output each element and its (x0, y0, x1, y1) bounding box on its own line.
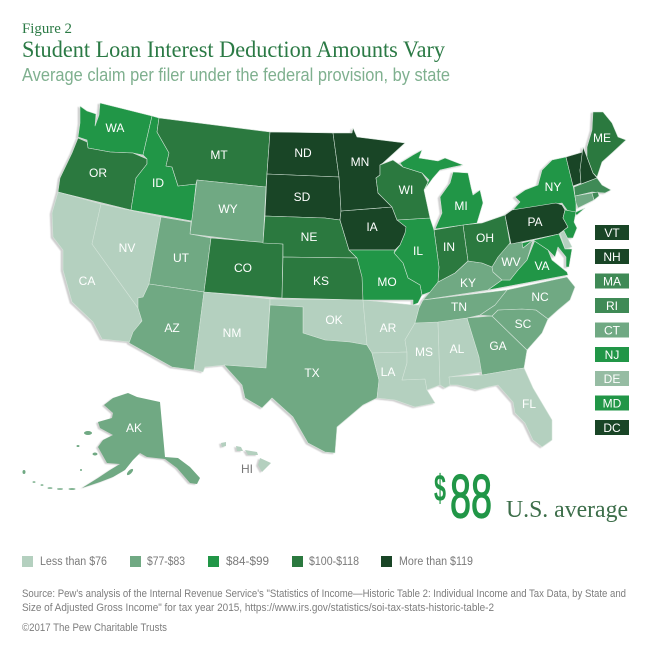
key: NJ (595, 347, 629, 362)
key: CT: CT (604, 324, 621, 338)
small-state key (595, 225, 629, 435)
key: MA (595, 274, 629, 288)
state: MI upper peninsula (400, 150, 463, 189)
state labels: NE (301, 230, 317, 244)
state labels: TX (304, 366, 320, 380)
state: OK (270, 299, 367, 345)
state labels: CA (79, 274, 95, 288)
state: IL (394, 218, 439, 295)
legend: $100-$118: $100-$118 (309, 556, 359, 568)
state labels: SD (294, 190, 311, 204)
subtitle: Average claim per filer under the federal provision, by state (22, 65, 450, 85)
state: GA (467, 316, 527, 375)
key: RI (595, 298, 629, 313)
state: MA (574, 178, 611, 196)
key: NH: NH (603, 250, 621, 264)
state: HI (221, 442, 271, 472)
state labels: LA (381, 365, 395, 379)
state: MO (349, 250, 422, 305)
state: AK (82, 393, 200, 488)
state: TN (415, 290, 507, 323)
state: DE (560, 231, 572, 249)
state: NY (512, 157, 585, 215)
state labels: UT (173, 251, 190, 265)
state labels: FL (522, 397, 536, 411)
figure label: Figure 2 (22, 21, 72, 37)
title: Student Loan Interest Deduction Amounts Vary (22, 37, 445, 62)
state: ID (131, 116, 196, 221)
state: FL (449, 368, 552, 447)
state: CT (575, 193, 594, 208)
state labels: ID (152, 176, 164, 190)
state: OH (463, 215, 510, 267)
callout: U.S. average (434, 462, 628, 530)
callout: U.S. average: U.S. average (506, 497, 628, 523)
state labels: TN (451, 300, 467, 314)
state: AZ (129, 284, 204, 370)
state: MN (333, 128, 405, 211)
state labels (79, 121, 611, 476)
key: VT: VT (604, 226, 620, 240)
state labels: MI (454, 199, 468, 213)
state labels: IN (443, 240, 455, 254)
state: NC (480, 277, 575, 319)
legend: $77-$83 (130, 556, 185, 568)
key: DC (595, 420, 629, 435)
state labels: WI (399, 183, 413, 197)
state: VT (566, 152, 583, 186)
state labels: VA (534, 259, 550, 273)
state: MT (157, 118, 270, 187)
state: MS (402, 322, 440, 390)
state: KY (423, 261, 502, 300)
state labels: AZ (164, 321, 180, 335)
key: NJ: NJ (605, 348, 619, 362)
state labels: OK (325, 313, 343, 327)
state labels: CO (234, 261, 252, 275)
key: RI: RI (606, 299, 618, 313)
state labels: SC (515, 317, 532, 331)
key: DE: DE (604, 372, 620, 386)
key: VT (595, 225, 629, 240)
key: DC: DC (603, 421, 621, 435)
state labels: MO (377, 275, 397, 289)
key: MA: MA (603, 274, 621, 288)
state: AR (363, 300, 420, 353)
state labels: IA (366, 220, 378, 234)
state: TX (224, 305, 379, 453)
state labels: WY (218, 202, 238, 216)
legend: less than $76: Less than $76 (40, 556, 107, 568)
key: MD: MD (603, 396, 622, 410)
state: NJ (559, 210, 577, 238)
state labels: KS (313, 274, 329, 288)
key: DE (595, 371, 629, 386)
state labels: AK (126, 421, 142, 435)
legend: $84-$99: $84-$99 (226, 556, 269, 568)
legend: $77-$83: $77-$83 (147, 556, 185, 568)
choropleth map of U.S. states (52, 103, 626, 488)
state labels: PA (527, 215, 543, 229)
key: CT (595, 322, 629, 338)
state labels: OR (89, 166, 107, 180)
callout: U.S. average: 88 (450, 462, 492, 530)
state labels: NY (545, 180, 561, 194)
state: SC (492, 309, 548, 350)
key: NH (595, 249, 629, 264)
state: OR (58, 138, 147, 210)
Alaska islands (22, 431, 134, 490)
state: AL (438, 318, 482, 388)
state labels: GA (489, 339, 507, 353)
state labels: ME (593, 131, 611, 145)
state: CA (52, 192, 142, 342)
state labels: IL (413, 244, 423, 258)
state: WI (376, 160, 430, 220)
state labels: MS (415, 345, 433, 359)
state labels: NM (223, 326, 241, 340)
state: MD (522, 234, 572, 267)
state: SD (265, 174, 341, 220)
legend: $84-$99 (208, 556, 269, 568)
state: LA (372, 352, 435, 407)
copyright: ©2017 The Pew Charitable Trusts (22, 622, 167, 634)
source note (22, 588, 626, 614)
state labels: WV (501, 255, 521, 269)
state: WV (492, 240, 533, 280)
state labels: ND (294, 146, 312, 160)
state: WY (190, 180, 266, 243)
state: NV (92, 204, 161, 308)
legend: more than $119: More than $119 (399, 556, 473, 568)
state labels: MN (351, 155, 369, 169)
state labels: WA (106, 121, 124, 135)
state: NE (263, 216, 357, 258)
state: RI (592, 192, 599, 200)
state: UT (149, 217, 211, 292)
source note: Size of Adjusted Gross Income" for tax year 2015, https://www.irs.gov/statistics/soi-tax-stats-historic-table-2 (22, 602, 494, 614)
state labels: NC (531, 290, 549, 304)
callout: U.S. average: $ (434, 468, 446, 510)
state: CO (204, 238, 283, 298)
state: MI (435, 172, 483, 229)
state labels: KY (460, 276, 476, 290)
key: MD (595, 396, 629, 410)
state: IA (340, 207, 406, 250)
state labels: AL (450, 342, 465, 356)
state: NH (580, 147, 597, 184)
state: ME (587, 112, 626, 177)
state: KS (282, 257, 363, 300)
state labels: HI (241, 462, 253, 476)
state: PA (505, 203, 568, 244)
state: IN (434, 225, 468, 282)
state labels: OH (476, 231, 494, 245)
state labels: NV (119, 241, 135, 255)
state: ND (267, 132, 339, 177)
state: WA (78, 103, 152, 155)
state labels: AR (380, 321, 397, 335)
state labels: MT (210, 148, 228, 162)
legend (22, 556, 473, 568)
state: NM (194, 292, 270, 372)
state: VA (488, 240, 568, 290)
